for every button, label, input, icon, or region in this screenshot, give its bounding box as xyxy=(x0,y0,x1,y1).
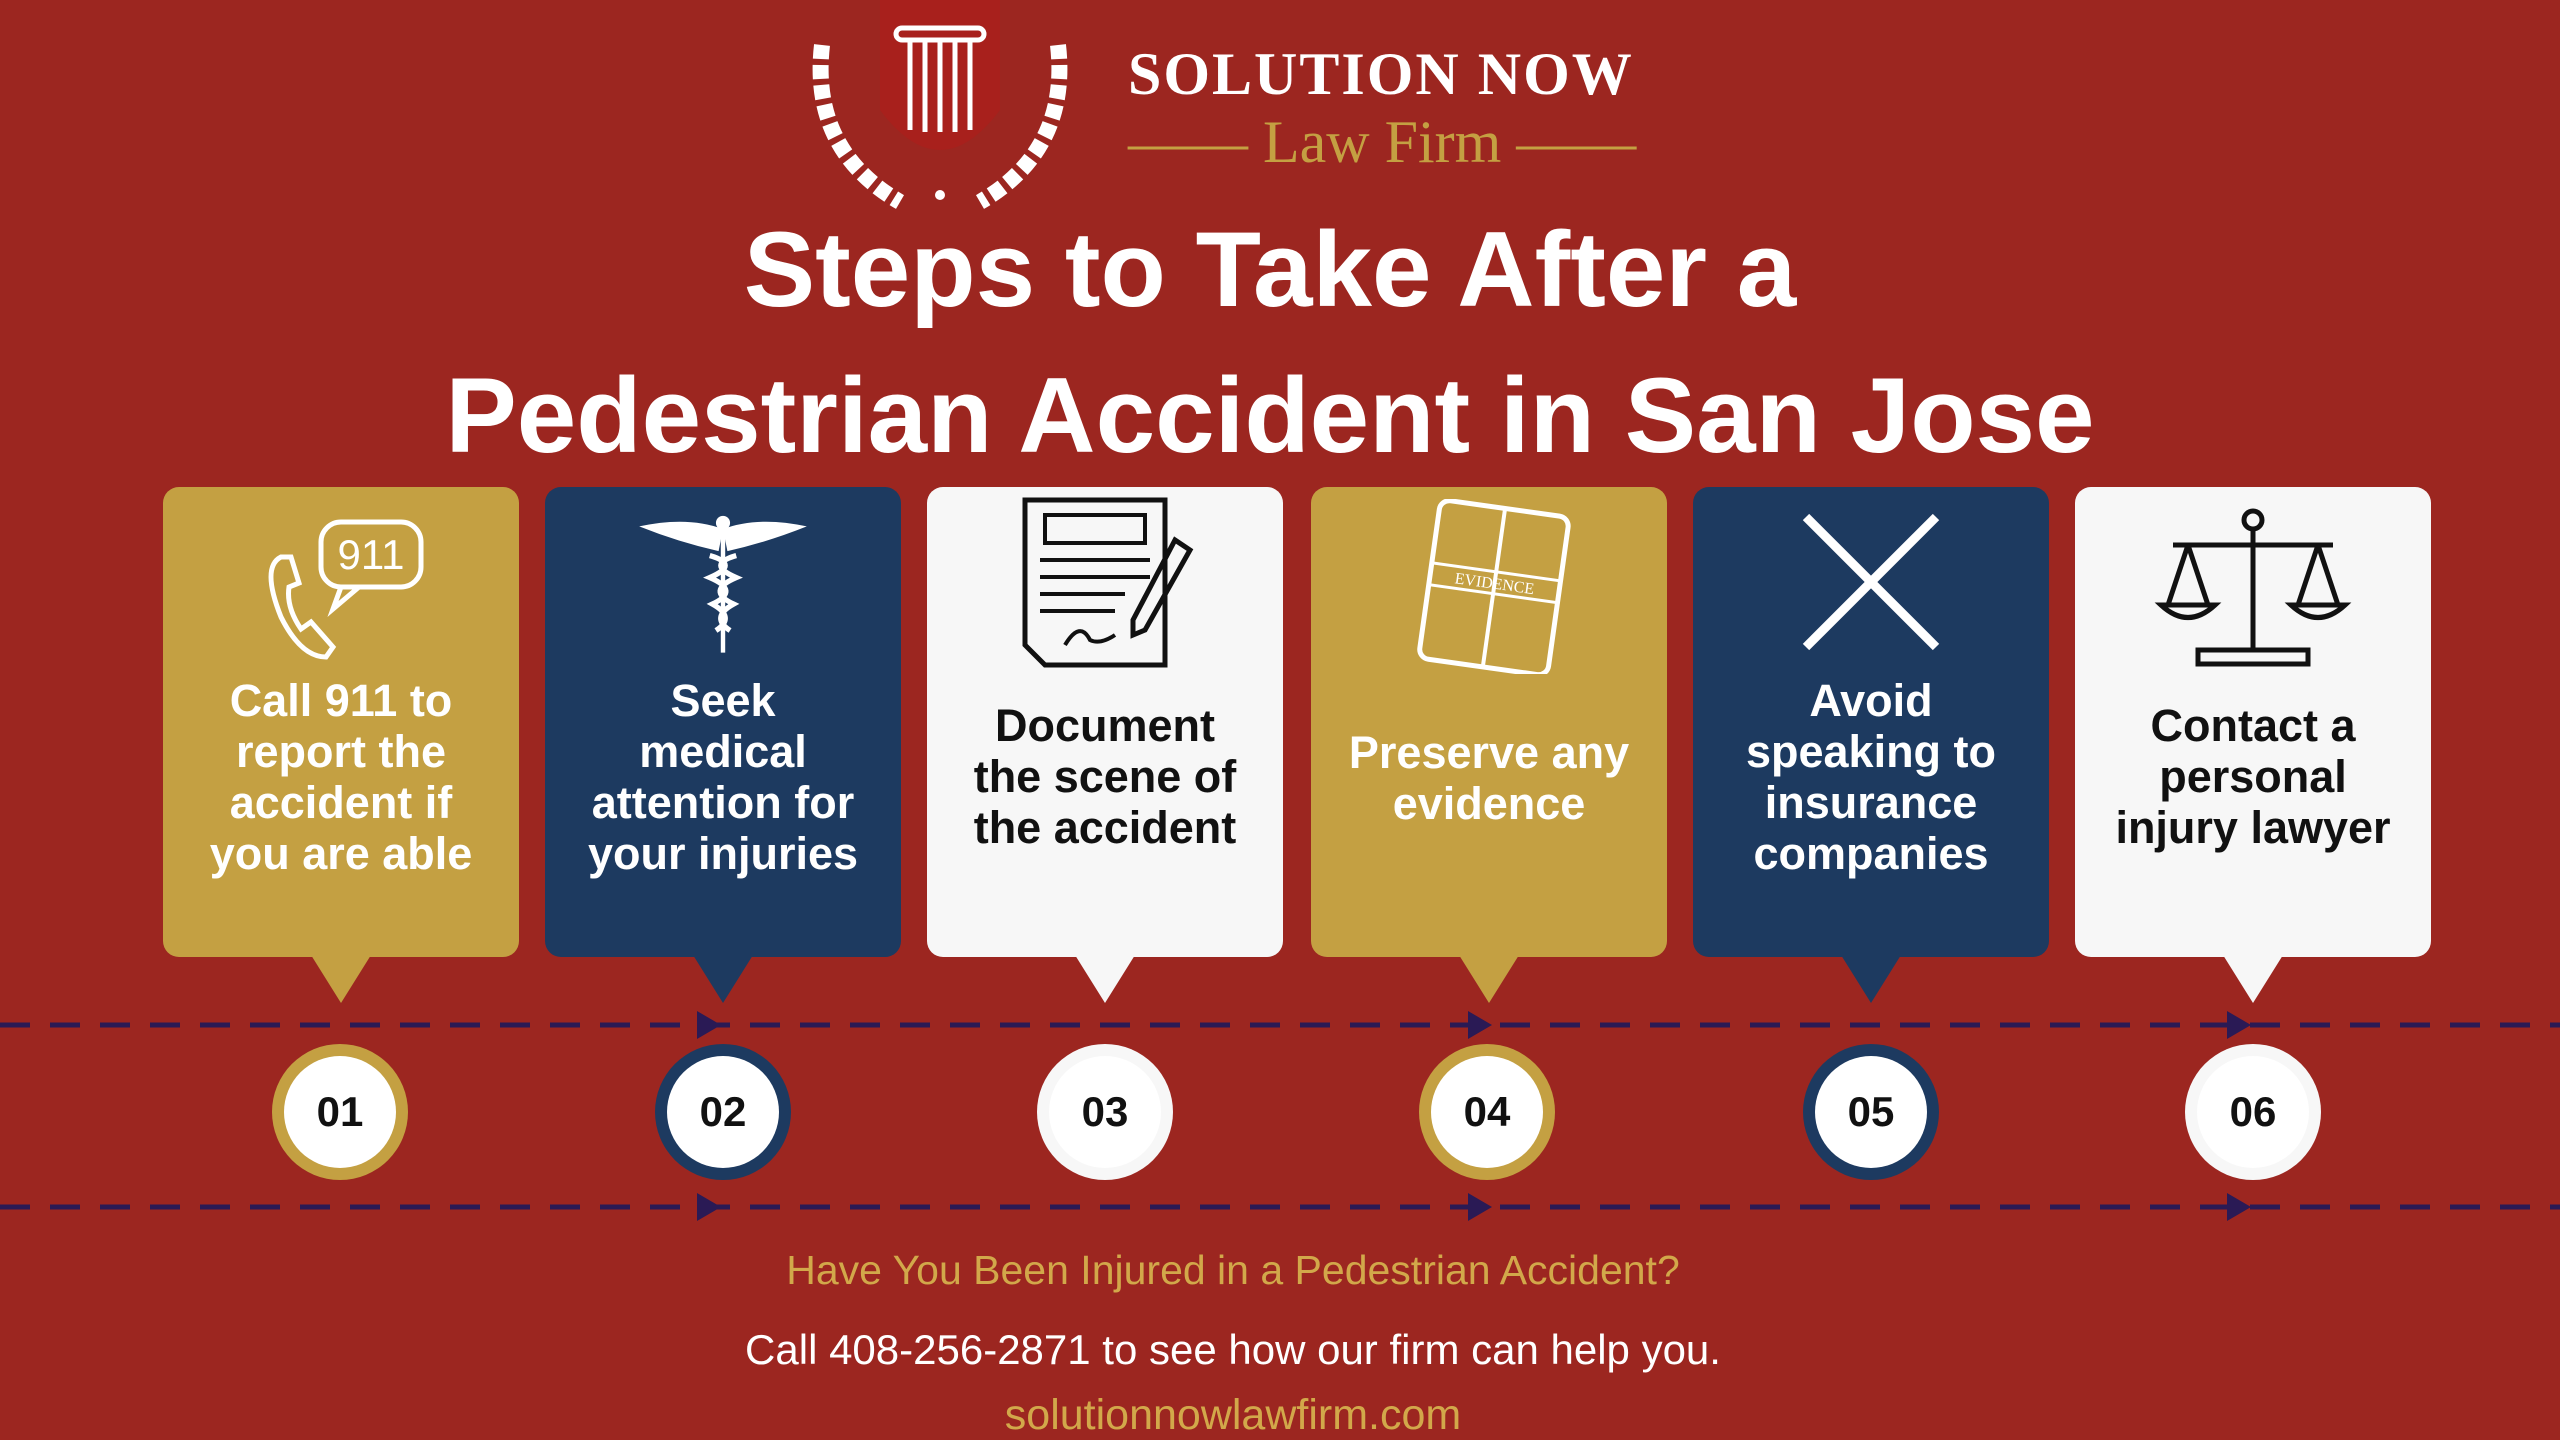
title: Steps to Take After a xyxy=(744,209,1796,329)
card 5: speaking to xyxy=(1746,726,1996,777)
icon: phone 911: 911 xyxy=(338,531,404,578)
card 2: Seek xyxy=(670,675,776,726)
text: 02 xyxy=(700,1088,746,1135)
card 1: report the xyxy=(236,726,446,777)
card 5 xyxy=(1693,487,2049,957)
card 3: Document xyxy=(995,700,1215,751)
icon: scales xyxy=(2154,508,2352,666)
icon: evidence envelope: EVIDENCE xyxy=(1454,570,1535,598)
card 1: Call 911 to xyxy=(230,675,452,726)
card 3: the accident xyxy=(974,802,1236,853)
card 1: you are able xyxy=(210,828,472,879)
card 4 xyxy=(1311,487,1667,957)
step circles: 01 xyxy=(317,1088,363,1135)
text: 06 xyxy=(2230,1088,2276,1135)
footer call: Call 408-256-2871 to see how our firm can help you. xyxy=(745,1326,1721,1373)
text: 04 xyxy=(1464,1088,1510,1135)
card 2 xyxy=(545,487,901,957)
icon: laurel and column xyxy=(812,0,1068,209)
card 2: medical xyxy=(639,726,807,777)
text: 05 xyxy=(1848,1088,1894,1135)
title xyxy=(445,209,2095,475)
card 5: companies xyxy=(1753,828,1989,879)
step circles xyxy=(272,1044,408,1180)
card 4: Preserve any xyxy=(1349,727,1629,778)
brand name: SOLUTION NOW xyxy=(1128,41,1634,107)
footer question: Have You Been Injured in a Pedestrian Accident? xyxy=(786,1247,1680,1293)
icon: document xyxy=(1022,498,1194,668)
card 6: personal xyxy=(2159,751,2347,802)
card 5: Avoid xyxy=(1809,675,1933,726)
icon: phone 911 xyxy=(268,520,424,660)
card 4: evidence xyxy=(1393,778,1585,829)
title: Pedestrian Accident in San Jose xyxy=(445,355,2095,475)
icon: evidence envelope xyxy=(1417,499,1571,674)
card 6: injury lawyer xyxy=(2115,802,2391,853)
card 3 xyxy=(927,487,1283,957)
card 3: the scene of xyxy=(974,751,1236,802)
footer url: solutionnowlawfirm.com xyxy=(1005,1391,1461,1439)
tagline: —— Law Firm —— xyxy=(1128,109,1636,175)
card 2: attention for xyxy=(592,777,854,828)
icon: X xyxy=(1802,514,1940,650)
text: 03 xyxy=(1082,1088,1128,1135)
card 5: insurance xyxy=(1765,777,1977,828)
card 6 xyxy=(2075,487,2431,957)
card 6: Contact a xyxy=(2150,700,2356,751)
card 1 xyxy=(163,487,519,957)
card 1: accident if xyxy=(230,777,452,828)
dashed lines xyxy=(0,1011,2560,1221)
card 2: your injuries xyxy=(588,828,858,879)
logo xyxy=(812,0,1637,209)
icon: caduceus xyxy=(639,516,807,653)
